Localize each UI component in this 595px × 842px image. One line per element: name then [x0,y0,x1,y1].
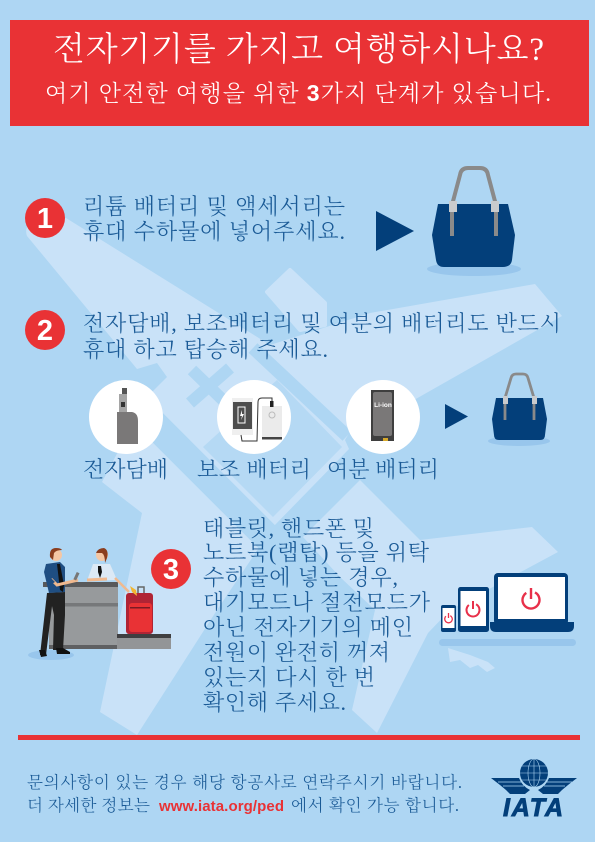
item labels [83,457,439,482]
step 2 badge [25,310,65,350]
step 3 text: 있는지 다시 한 번 [203,665,375,690]
step 3 text: 아닌 전자기기의 메인 [203,615,413,640]
step 2 text: 전자담배, 보조배터리 및 여분의 배터리도 반드시 [83,311,561,336]
website link: www.iata.org/ped [158,798,284,815]
step 3 text: 수하물에 넣는 경우, [203,565,398,590]
footer text: 에서 확인 가능 합니다. [291,796,459,815]
IATA logo: IATA [503,794,563,822]
step 3 text: 대기모드나 절전모드가 [203,590,431,615]
step 3 badge [151,549,191,589]
footer text: 더 자세한 정보는 [27,795,150,815]
step 3 text: 전원이 완전히 꺼져 [203,640,390,665]
step 1 text: 휴대 수하물에 넣어주세요. [83,219,345,244]
icon: e-cigarette [89,380,163,454]
step 1 text: 리튬 배터리 및 액세서리는 [83,194,345,219]
IATA logo [491,759,577,822]
icon: small carry-on bag [488,374,550,446]
step 3 badge: 3 [163,554,179,586]
background airplane silhouette [26,217,562,735]
check-in counter illustration [28,548,171,660]
title banner [10,20,589,126]
step 3 text: 확인해 주세요. [203,690,346,715]
agent [87,548,129,592]
tablet [458,587,489,632]
step 3 text [203,516,431,715]
item labels: 보조 배터리 [197,457,311,482]
step 2 text [83,311,561,362]
step 3 text: 노트북(랩탑) 등을 위탁 [203,540,430,565]
step 3 text: 태블릿, 핸드폰 및 [203,516,374,541]
laptop [490,573,574,632]
arrow 1 [376,211,414,251]
step 2 badge: 2 [37,315,53,347]
icon: spare battery [346,380,420,454]
footer divider [18,735,580,740]
step 2 text: 휴대 하고 탑승해 주세요. [83,337,328,362]
icon: spare battery: Li-ion [374,402,392,409]
passenger [39,548,80,657]
icon: powered-off devices [439,573,576,646]
phone [441,605,456,632]
step 1 badge [25,198,65,238]
counter [43,582,118,649]
step 1 badge: 1 [37,203,53,235]
step 1 text [83,194,345,244]
icon: power bank [217,380,291,454]
conveyor belt [117,634,171,649]
footer text [27,772,462,815]
icon: large carry-on bag [427,168,521,276]
item labels: 여분 배터리 [327,457,439,482]
subtitle: 여기 안전한 여행을 위한 3가지 단계가 있습니다. [45,80,551,106]
footer text: 문의사항이 있는 경우 해당 항공사로 연락주시기 바랍니다. [27,772,462,792]
title: 전자기기를 가지고 여행하시나요? [53,31,544,68]
arrow 2 [445,404,468,429]
suitcase [126,586,153,634]
item labels: 전자담배 [83,457,168,482]
